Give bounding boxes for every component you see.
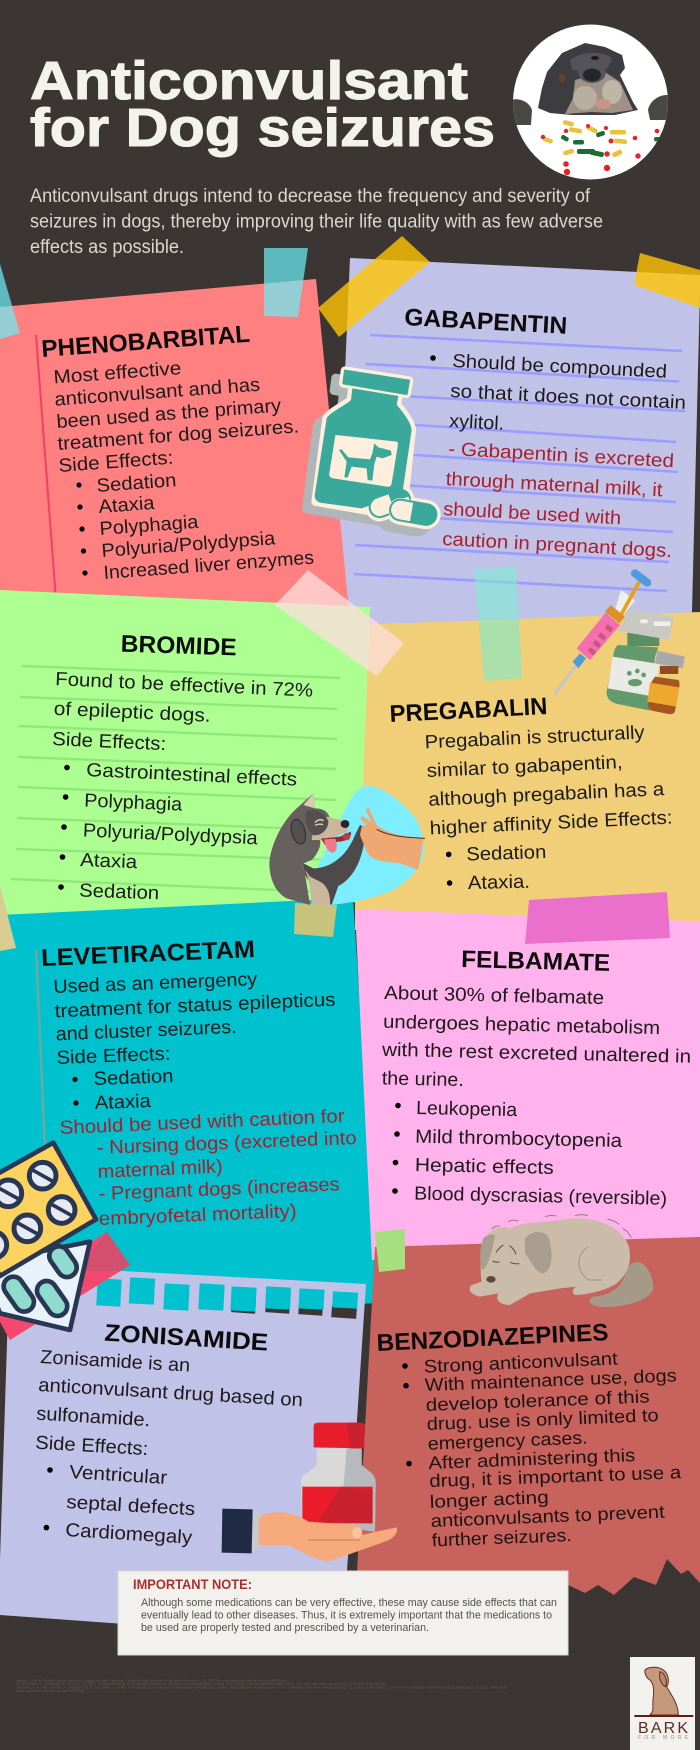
text: benzodiazepines notes: longer acting bbox=[429, 1487, 549, 1512]
tape: tan left edge bbox=[0, 886, 16, 951]
logo tagline: FOR MORE bbox=[638, 1735, 689, 1741]
heading: phenobarbital: PHENOBARBITAL bbox=[40, 321, 251, 363]
text: felbamate description: the urine. bbox=[382, 1068, 464, 1091]
text: zonisamide description: septal defects bbox=[66, 1492, 196, 1520]
icon: white blister pack bbox=[0, 1242, 90, 1330]
heading: important note: IMPORTANT NOTE: bbox=[133, 1576, 252, 1592]
references bbox=[16, 1679, 508, 1693]
text: bromide description: Found to be effective in 72% bbox=[55, 669, 314, 702]
text: important note body: Although some medications can be very effective, these may cause side effects that can bbox=[141, 1597, 557, 1609]
text: benzodiazepines notes: drug, it is important to use a bbox=[429, 1462, 683, 1491]
text: gabapentin notes bbox=[430, 351, 687, 562]
references: Lacoly, J. (2014). Pediatric seizure disorders in dogs and cats. Veterinary Clinics of North America: Small Animal Practice, 52(2), 279-305. https://pubmed.ncbi.nlm.nih.gov/35379496/ bbox=[16, 1679, 287, 1683]
tape: pink under blister packs bbox=[0, 1232, 130, 1340]
text: benzodiazepines notes: anticonvulsants to prevent bbox=[430, 1502, 665, 1531]
text: levetiracetam description: Used as an emergency bbox=[53, 969, 258, 998]
text: levetiracetam cautions bbox=[59, 1106, 357, 1230]
text: phenobarbital description: treatment for dog seizures. bbox=[57, 416, 300, 455]
text: phenobarbital description: anticonvulsant and has bbox=[54, 375, 261, 411]
text: levetiracetam cautions: embryofetal mortality) bbox=[98, 1201, 297, 1230]
tape: aqua between gabapentin and pregabalin bbox=[474, 566, 522, 681]
text: bromide description: Polyuria/Polydypsia bbox=[82, 820, 259, 849]
text: felbamate description: Leukopenia bbox=[416, 1098, 518, 1121]
text: felbamate description: Mild thrombocytopenia bbox=[415, 1127, 623, 1152]
heading: zonisamide: ZONISAMIDE bbox=[104, 1320, 269, 1357]
text: pregabalin description: Ataxia. bbox=[468, 872, 530, 894]
panel: zonisamide bbox=[0, 1265, 366, 1640]
text: levetiracetam cautions: - Pregnant dogs (increases bbox=[98, 1174, 340, 1205]
references: von Klopmann, T., Rambeck, B., & Tipold, A. (2007). Prospective study of zonisamide therapy for refractory idiopathic epilepsy in dogs. The Journal of Small Animal Practice, 48(3), 134-138. https://doi.org/10.1111/j.1748-5827.2006.00225.x bbox=[16, 1682, 387, 1686]
heading: levetiracetam: LEVETIRACETAM bbox=[41, 936, 256, 972]
illustration: hand holding red pill bottle bbox=[222, 1423, 397, 1562]
panel: felbamate bbox=[355, 892, 700, 1260]
panel: phenobarbital bbox=[0, 279, 350, 620]
text: levetiracetam description: Side Effects: bbox=[56, 1044, 171, 1069]
text: pregabalin description: although pregabalin has a bbox=[428, 779, 665, 811]
text: zonisamide description: sulfonamide. bbox=[36, 1404, 151, 1431]
film holes strip bbox=[96, 1277, 358, 1319]
text: phenobarbital description: Sedation bbox=[96, 470, 177, 497]
text: phenobarbital description: Polyuria/Polydypsia bbox=[101, 528, 276, 562]
text: bromide description bbox=[52, 669, 314, 904]
tape: green bbox=[375, 1229, 405, 1272]
panel: gabapentin background bbox=[335, 258, 700, 640]
text: gabapentin notes: should be used with bbox=[443, 499, 622, 529]
text: levetiracetam cautions: - Nursing dogs (excreted into bbox=[96, 1128, 357, 1159]
text: gabapentin notes: Should be compounded bbox=[452, 351, 668, 383]
tape: teal over phenobarbital bbox=[264, 248, 308, 317]
references: Trepanier, L. A., Van Schoick, A., Schwark, W. S., & Carrillo, J. (1998). Therapeutic serum drug concentrations in epileptic dogs treated with potassium bromide alone or in combination with other anticonvulsants: 122 cases (1992-1996). Journal of the American Veterinary Medical Association, 213(10), 1449-1453. bbox=[16, 1686, 508, 1690]
text: gabapentin notes: through maternal milk, it bbox=[445, 469, 664, 501]
logo: Bark For More bbox=[630, 1657, 695, 1750]
title bbox=[30, 51, 495, 158]
text: phenobarbital description: been used as the primary bbox=[56, 396, 282, 433]
references: https://pubmed.ncbi.nlm.nih.gov/9828942/ bbox=[16, 1689, 85, 1693]
intro paragraph: Anticonvulsant drugs intend to decrease the frequency and severity of bbox=[30, 186, 591, 207]
text: phenobarbital description: Increased liver enzymes bbox=[103, 548, 315, 584]
text: bromide description: Side Effects: bbox=[52, 729, 167, 755]
text: pregabalin description: Pregabalin is structurally bbox=[424, 722, 646, 753]
text: bromide description: Polyphagia bbox=[84, 791, 183, 816]
tape: yellow over gabapentin bbox=[318, 236, 430, 337]
icon: teal dog medicine bottle with capsules bbox=[306, 371, 438, 534]
text: zonisamide description: anticonvulsant drug based on bbox=[38, 1375, 303, 1411]
text: important note body bbox=[141, 1597, 557, 1634]
text: gabapentin notes: - Gabapentin is excreted bbox=[448, 439, 675, 472]
tape: teal left edge bbox=[0, 264, 20, 339]
text: benzodiazepines notes: drug. use is only limited to bbox=[426, 1405, 659, 1434]
icon: yellow blister pack bbox=[0, 1143, 96, 1276]
text: pregabalin description: Sedation bbox=[466, 842, 547, 865]
text: phenobarbital description: Polyphagia bbox=[99, 512, 200, 540]
panel: bromide bbox=[0, 590, 370, 920]
text: pregabalin description bbox=[424, 722, 673, 894]
text: felbamate description: undergoes hepatic metabolism bbox=[383, 1012, 660, 1039]
panel: levetiracetam bbox=[0, 898, 379, 1320]
text: zonisamide description: Ventricular bbox=[69, 1462, 169, 1489]
text: levetiracetam description: treatment for status epilepticus bbox=[54, 990, 336, 1022]
text: felbamate description bbox=[381, 983, 691, 1210]
text: levetiracetam cautions: maternal milk) bbox=[97, 1156, 223, 1183]
text: gabapentin notes: xylitol. bbox=[449, 411, 505, 435]
tape: yellow top right bbox=[634, 253, 700, 308]
text: important note body: be used are properly tested and prescribed by a veterinarian. bbox=[141, 1622, 429, 1634]
text: felbamate description: Hepatic effects bbox=[415, 1155, 554, 1179]
heading: bromide: BROMIDE bbox=[120, 631, 237, 661]
text: levetiracetam description: Sedation bbox=[93, 1066, 174, 1090]
title: Anticonvulsant bbox=[30, 51, 468, 111]
tape: pale pink between panels bbox=[275, 570, 404, 676]
text: bromide description: Ataxia bbox=[80, 850, 138, 873]
text: benzodiazepines notes: further seizures. bbox=[431, 1525, 572, 1550]
icon: syringe bbox=[555, 573, 647, 693]
text: zonisamide description: Side Effects: bbox=[35, 1433, 149, 1460]
text: levetiracetam description: Ataxia bbox=[94, 1091, 152, 1114]
text: phenobarbital description bbox=[53, 358, 315, 584]
text: phenobarbital description: Most effective bbox=[53, 358, 182, 388]
intro paragraph bbox=[30, 186, 603, 258]
text: pregabalin description: higher affinity Side Effects: bbox=[429, 807, 673, 839]
intro paragraph: seizures in dogs, thereby improving their life quality with as few adverse bbox=[30, 212, 603, 232]
text: levetiracetam description: and cluster seizures. bbox=[55, 1017, 237, 1045]
heading: gabapentin: GABAPENTIN bbox=[404, 304, 568, 340]
text: levetiracetam cautions: Should be used with caution for bbox=[59, 1106, 346, 1139]
text: phenobarbital description: Ataxia bbox=[98, 493, 156, 518]
illustration: sleeping dog bbox=[470, 1215, 653, 1307]
logo wordmark: BARK bbox=[638, 1720, 688, 1737]
text: pregabalin description: similar to gabapentin, bbox=[426, 752, 623, 782]
text: benzodiazepines notes: With maintenance use, dogs bbox=[424, 1365, 677, 1395]
text: benzodiazepines notes: develop tolerance of this bbox=[425, 1386, 650, 1415]
image: dog with pills in circle bbox=[510, 24, 670, 180]
heading: pregabalin: PREGABALIN bbox=[389, 693, 548, 728]
text: important note body: eventually lead to other diseases. Thus, it is extremely important that the medications to bbox=[141, 1610, 552, 1622]
text: zonisamide description: Cardiomegaly bbox=[65, 1520, 193, 1549]
callout: important note bbox=[118, 1571, 568, 1655]
text: felbamate description: About 30% of felbamate bbox=[384, 983, 604, 1009]
text: felbamate description: Blood dyscrasias (reversible) bbox=[414, 1184, 667, 1210]
text: benzodiazepines notes bbox=[402, 1348, 683, 1550]
illustration: dog high-five with hand bbox=[269, 786, 425, 905]
panel: pregabalin bbox=[355, 612, 700, 930]
panel: benzodiazepines bbox=[357, 1237, 700, 1600]
text: phenobarbital description: Side Effects: bbox=[58, 448, 174, 477]
text: bromide description: Gastrointestinal effects bbox=[86, 760, 298, 791]
text: benzodiazepines notes: emergency cases. bbox=[427, 1428, 588, 1454]
text: benzodiazepines notes: Strong anticonvulsant bbox=[423, 1348, 618, 1377]
text: felbamate description: with the rest excreted unaltered in bbox=[381, 1040, 691, 1068]
text: zonisamide description: Zonisamide is an bbox=[40, 1347, 191, 1377]
heading: felbamate: FELBAMATE bbox=[461, 946, 610, 977]
panel: gabapentin bbox=[354, 304, 687, 591]
text: levetiracetam description bbox=[53, 969, 336, 1114]
heading: benzodiazepines: BENZODIAZEPINES bbox=[376, 1319, 609, 1357]
text: zonisamide description bbox=[35, 1347, 303, 1549]
text: bromide description: of epileptic dogs. bbox=[53, 699, 211, 727]
text: gabapentin notes: caution in pregnant dogs. bbox=[442, 529, 673, 562]
text: benzodiazepines notes: After administering this bbox=[428, 1445, 636, 1473]
text: gabapentin notes: so that it does not contain bbox=[450, 381, 687, 414]
tape: tan bottom of bromide bbox=[294, 903, 337, 937]
text: bromide description: Sedation bbox=[79, 881, 160, 904]
tape: magenta bbox=[525, 892, 670, 944]
title: for Dog seizures bbox=[30, 98, 495, 158]
icon: medicine bottles bbox=[607, 610, 685, 714]
intro paragraph: effects as possible. bbox=[30, 237, 184, 258]
